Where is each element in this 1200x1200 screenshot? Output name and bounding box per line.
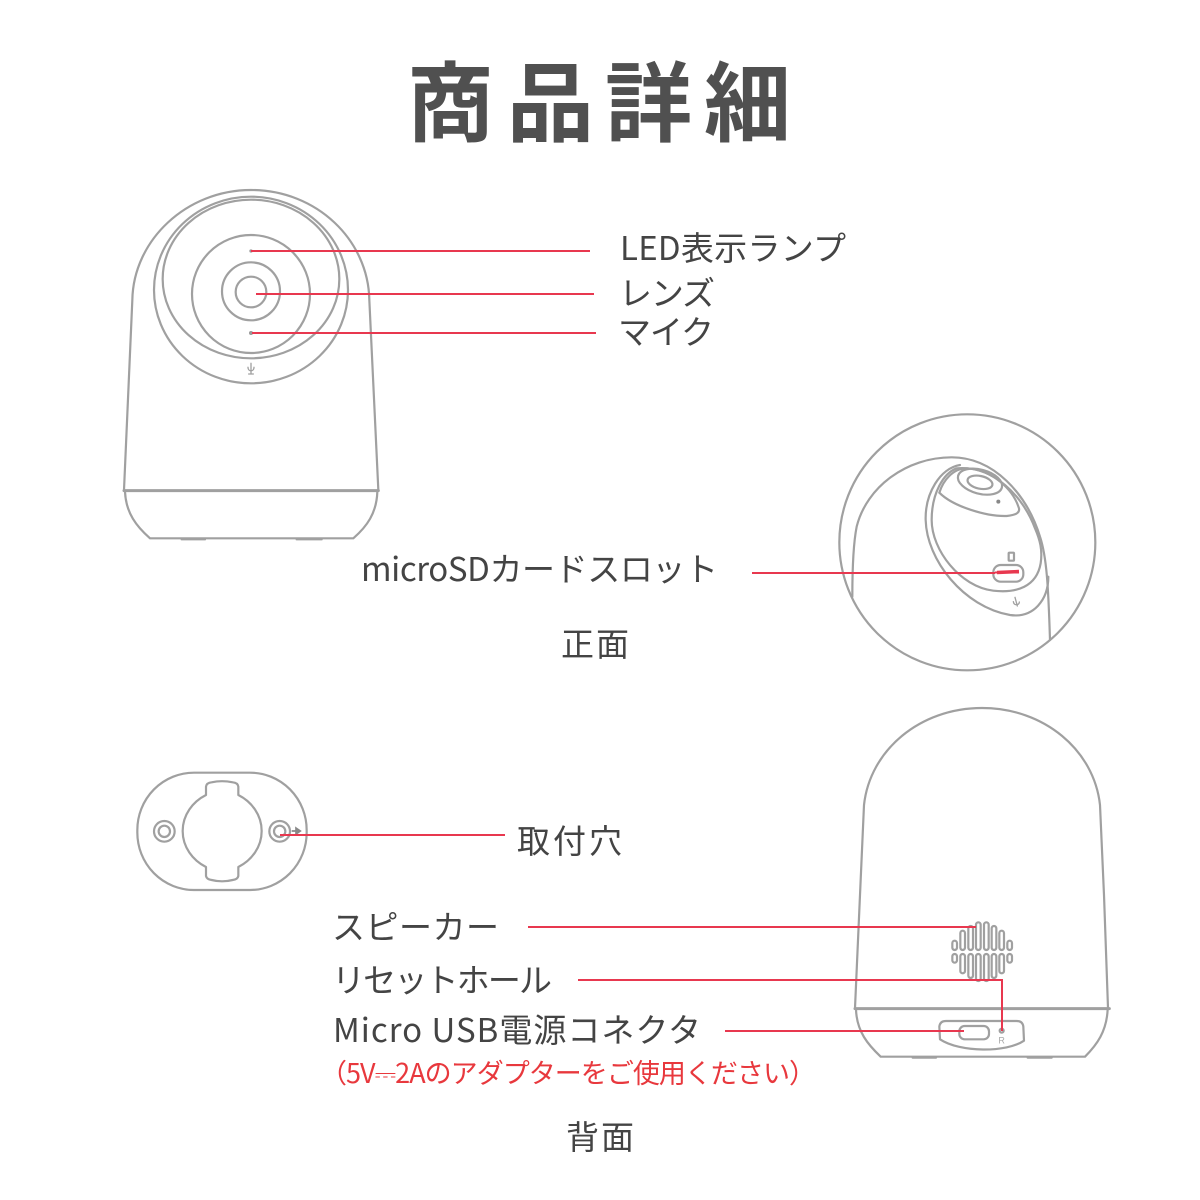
callout line: micro USB	[725, 1030, 964, 1032]
caption: front: 正面	[561, 618, 629, 666]
illustration: microSD slot close-up	[839, 414, 1095, 670]
callout line: microSD slot	[752, 572, 1019, 574]
callout line: LED lamp	[251, 250, 590, 252]
caption: back: 背面	[566, 1111, 634, 1159]
callout line: mounting hole	[280, 834, 505, 836]
illustration: camera front view	[124, 190, 378, 539]
illustration: camera back view	[855, 708, 1109, 1058]
label: microSD card slot: microSDカードスロット	[361, 543, 718, 591]
callout line: microphone	[252, 332, 596, 334]
base: R	[998, 1036, 1005, 1046]
note: adapter requirement: （5V⎓2Aのアダプターをご使用ください）	[320, 1052, 816, 1091]
label: mounting hole: 取付穴	[517, 815, 622, 863]
base	[855, 922, 1109, 1058]
illustration: mounting plate	[137, 773, 307, 890]
camera body	[855, 708, 1108, 1008]
label: microphone: マイク	[618, 306, 714, 354]
label: micro USB power connector: Micro USB電源コネクタ	[333, 1004, 701, 1052]
slot highlight	[997, 572, 1019, 573]
callout line: reset hole	[578, 980, 1002, 1031]
callout line: lens	[256, 293, 594, 295]
label: speaker: スピーカー	[332, 901, 499, 949]
title: 商品詳細	[407, 34, 791, 160]
label: lens: レンズ	[619, 267, 715, 315]
label: reset hole: リセットホール	[332, 954, 552, 1002]
label: LED lamp: LED表示ランプ	[620, 222, 846, 270]
callout line: speaker	[528, 926, 976, 928]
